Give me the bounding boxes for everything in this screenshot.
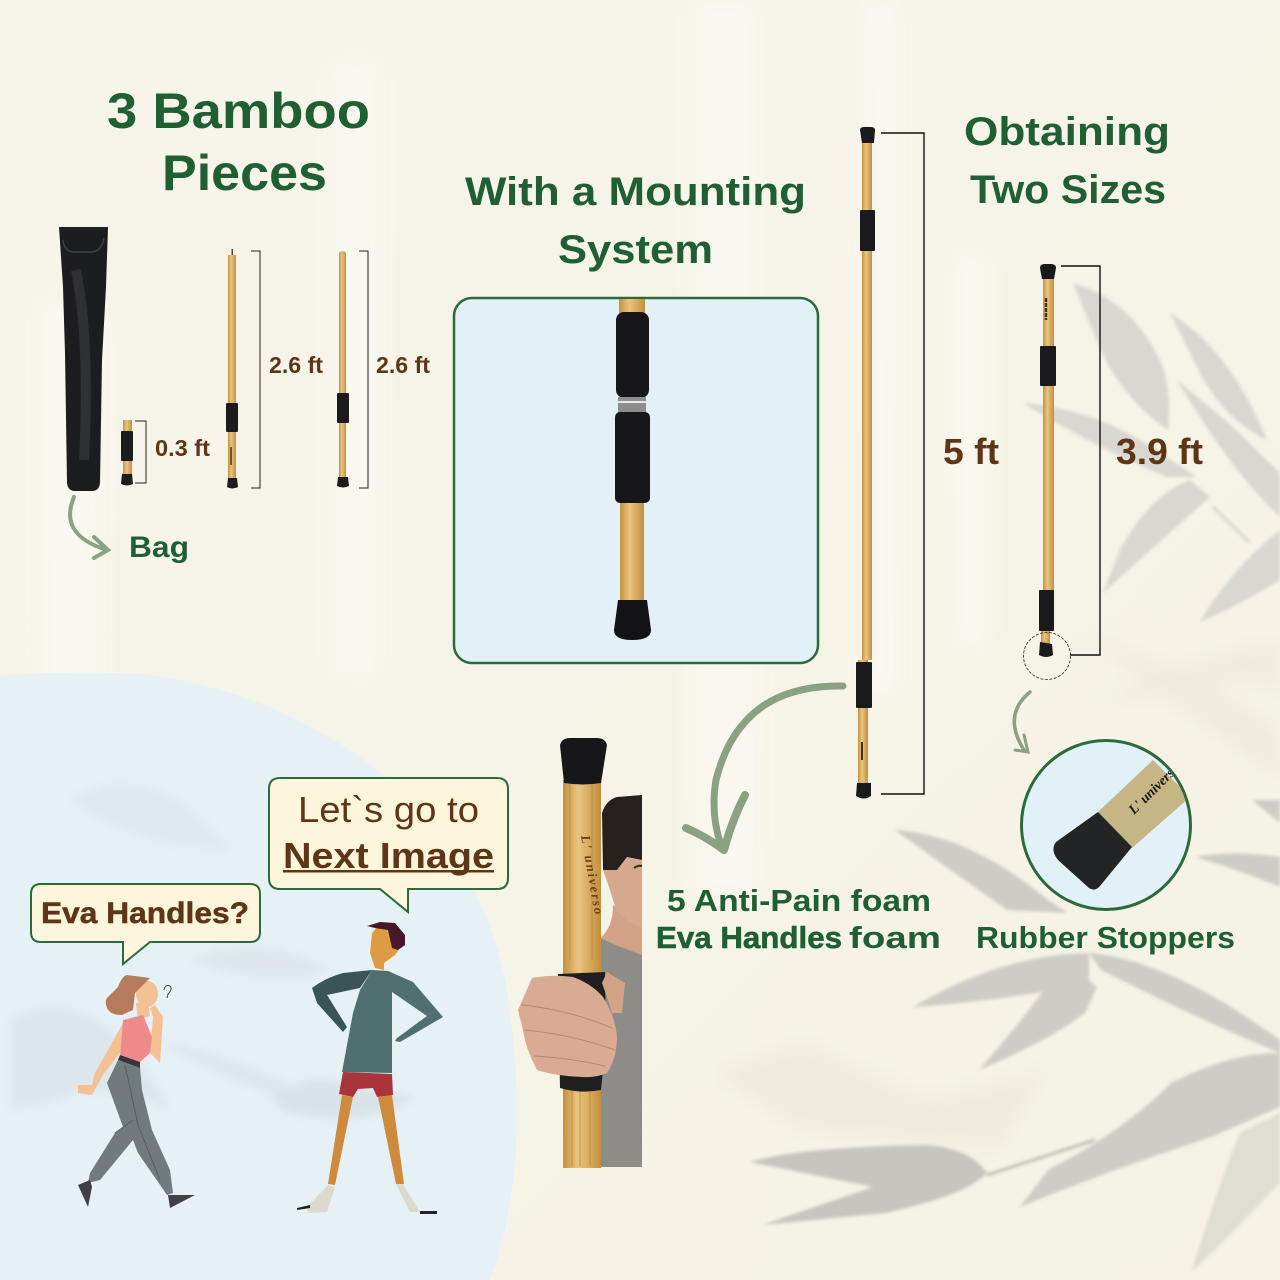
heading: 3 Bamboo Pieces: 3 Bamboo <box>107 83 370 139</box>
label: 2.6 ft: 2.6 ft <box>376 352 430 378</box>
photo: person holding stick: L' universo <box>578 833 607 916</box>
label: Eva handles foam: foam <box>849 920 941 955</box>
label: Bag: Bag <box>129 531 189 564</box>
piece one 2.6 ft <box>226 249 323 488</box>
speech bubble: Let's go to Next Image: Let`s go to <box>298 789 479 830</box>
label: 3.9 ft: 3.9 ft <box>1116 431 1203 472</box>
circle: rubber stopper detail: L' univers <box>1126 766 1178 819</box>
label: Eva handles foam <box>656 883 941 955</box>
photo: person holding stick <box>518 738 642 1168</box>
heading: With a Mounting System: System <box>558 228 713 272</box>
heading: With a Mounting System <box>465 170 806 272</box>
label: Eva handles foam: 5 Anti-Pain foam <box>667 883 931 918</box>
circle: rubber stopper detail <box>1022 740 1190 910</box>
speech bubble: Let's go to Next Image <box>269 778 508 912</box>
bamboo leaves top right <box>1023 283 1280 622</box>
speech bubble: Let's go to Next Image: Next Image <box>283 835 494 876</box>
small piece 0.3 ft <box>121 420 210 486</box>
heading: 3 Bamboo Pieces <box>107 83 370 201</box>
label: 2.6 ft: 2.6 ft <box>269 352 323 378</box>
label: Rubber Stoppers: Rubber Stoppers <box>976 920 1235 955</box>
arrow: to Eva handles <box>686 686 843 850</box>
heading: 3 Bamboo Pieces: Pieces <box>162 145 327 201</box>
label: Eva handles foam: Eva Handles <box>656 920 842 955</box>
piece two 2.6 ft <box>337 251 430 488</box>
pale background leaves <box>713 640 1280 1150</box>
heading: Obtaining Two Sizes: Two Sizes <box>970 168 1166 212</box>
arrow: to rubber stopper <box>1014 692 1030 752</box>
heading: Obtaining Two Sizes: Obtaining <box>964 110 1170 154</box>
figure: man standing <box>297 922 443 1214</box>
label: 0.3 ft: 0.3 ft <box>155 435 210 461</box>
label: 5 ft: 5 ft <box>943 431 999 472</box>
blue blob <box>0 672 517 1280</box>
speech bubble: Eva Handles?: Eva Handles? <box>41 897 249 930</box>
arrow to bag label <box>70 497 108 558</box>
short pole 3.9 ft <box>1024 264 1203 680</box>
heading: With a Mounting System: With a Mounting <box>465 170 806 214</box>
long pole 5 ft <box>856 127 999 798</box>
bamboo leaves bottom right <box>750 800 1280 1273</box>
panel: mounting system <box>454 298 818 663</box>
figure: woman walking <box>78 975 195 1208</box>
bag <box>59 227 108 491</box>
speech bubble: Eva Handles? <box>31 884 260 964</box>
heading: Obtaining Two Sizes <box>964 110 1170 212</box>
